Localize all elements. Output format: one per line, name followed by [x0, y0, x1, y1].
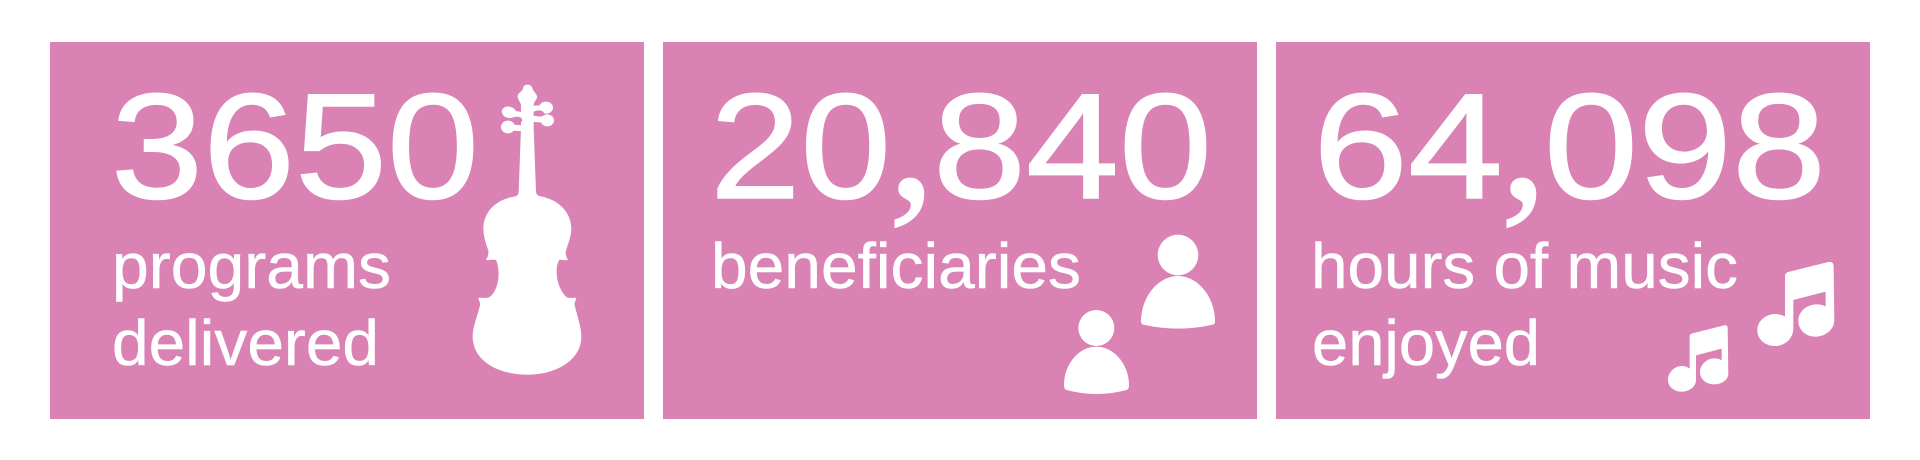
icon: violin: [473, 85, 581, 375]
number: 64,098: 098: [1544, 62, 1826, 230]
number: 3650: 3650: [111, 62, 479, 230]
number: 20,840: ,: [888, 30, 936, 240]
label: beneficiaries: beneficiaries: [711, 230, 1081, 302]
icon: music note large: [1757, 262, 1834, 346]
number: 20,840: 840: [933, 62, 1212, 230]
icon: music note small: [1668, 325, 1728, 392]
number: 64,098: ,: [1500, 30, 1548, 240]
number: 20,840: 20: [710, 62, 891, 230]
icon: person large: [1141, 235, 1215, 329]
panel: beneficiaries: [663, 30, 1257, 419]
panel: programs delivered: [50, 42, 644, 419]
label: delivered: delivered: [112, 307, 379, 379]
label: enjoyed: enjoyed: [1312, 307, 1540, 379]
number: 64,098: [1313, 30, 1826, 240]
number: 64,098: 64: [1313, 62, 1503, 230]
label: programs: programs: [112, 230, 391, 302]
panel: hours of music enjoyed: [1276, 30, 1870, 419]
label: hours of music: hours of music: [1311, 230, 1738, 302]
number: 20,840: [710, 30, 1212, 240]
icon: person small: [1064, 310, 1129, 394]
